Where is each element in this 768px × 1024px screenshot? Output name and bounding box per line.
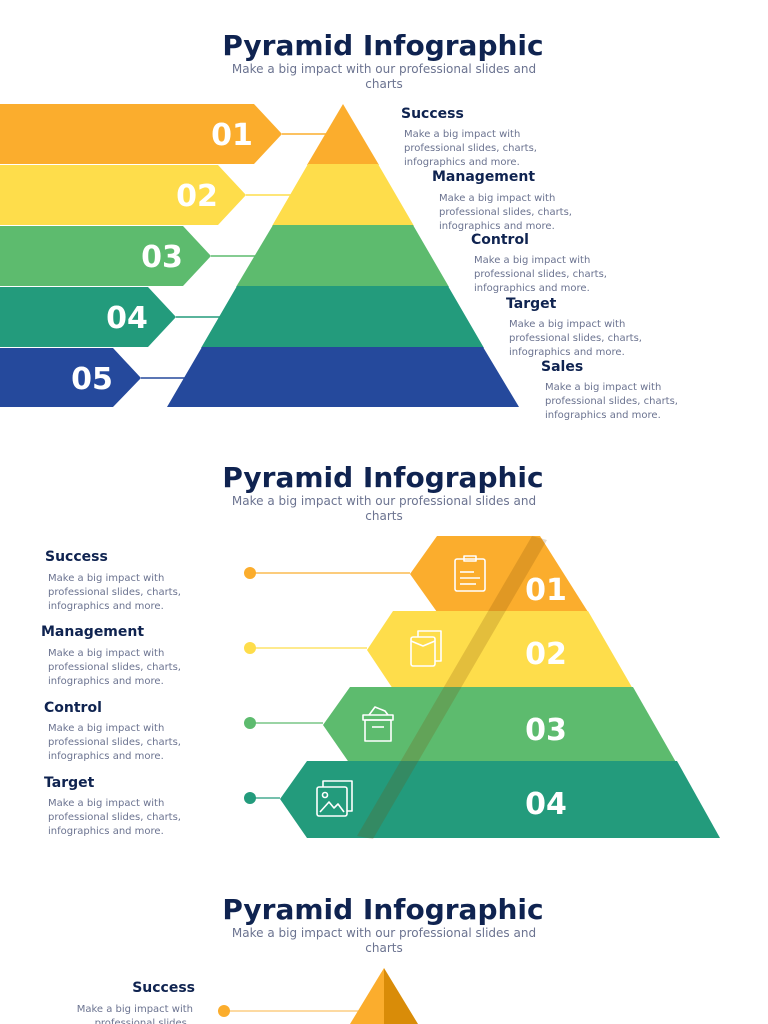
section 3 title	[222, 893, 544, 955]
arrow bars: 05	[71, 362, 113, 397]
pyramid 3	[218, 968, 418, 1024]
labels section 2: professional slides, charts,	[48, 737, 181, 748]
pyramid 2: 03	[525, 713, 567, 748]
labels section 2: Make a big impact with	[48, 573, 164, 584]
section 1 title: charts	[365, 77, 403, 91]
section 3 label	[77, 980, 195, 1024]
section 3 label: Make a big impact with	[77, 1004, 193, 1015]
labels section 1: Make a big impact with	[404, 129, 520, 140]
labels section 1: Target	[506, 296, 557, 312]
arrow bars: 03	[141, 240, 183, 275]
labels section 2: Management	[41, 624, 144, 640]
labels section 2: Make a big impact with	[48, 723, 164, 734]
pyramid 2: 02	[525, 637, 567, 672]
section 2 title	[222, 461, 544, 523]
labels section 1: Make a big impact with	[439, 193, 555, 204]
section 1 title: Make a big impact with our professional slides and	[232, 62, 536, 76]
section 2 title: Pyramid Infographic	[222, 461, 544, 494]
labels section 2: professional slides, charts,	[48, 662, 181, 673]
pyramid 2	[244, 536, 720, 839]
labels section 1: professional slides, charts,	[404, 143, 537, 154]
labels section 1: professional slides, charts,	[474, 269, 607, 280]
labels section 2: infographics and more.	[48, 826, 164, 837]
labels section 1: infographics and more.	[439, 221, 555, 232]
labels section 2: Make a big impact with	[48, 798, 164, 809]
labels section 1: infographics and more.	[404, 157, 520, 168]
section 1 title: Pyramid Infographic	[222, 29, 544, 62]
arrow bars: 01	[211, 118, 253, 153]
section 2 title: Make a big impact with our professional slides and	[232, 494, 536, 508]
labels section 2: infographics and more.	[48, 751, 164, 762]
icon: image	[317, 781, 352, 816]
labels section 1: Make a big impact with	[509, 319, 625, 330]
labels section 1: professional slides, charts,	[509, 333, 642, 344]
labels section 2: Control	[44, 700, 102, 716]
labels section 2: professional slides, charts,	[48, 587, 181, 598]
labels section 2: professional slides, charts,	[48, 812, 181, 823]
labels section 2: infographics and more.	[48, 676, 164, 687]
labels section 1: infographics and more.	[509, 347, 625, 358]
labels section 2: Target	[44, 775, 95, 791]
labels section 2	[41, 549, 181, 837]
icon: envelope	[411, 631, 441, 666]
icon: clipboard	[455, 556, 485, 591]
labels section 1: Sales	[541, 359, 583, 375]
labels section 1: Success	[401, 106, 464, 122]
labels section 1	[401, 106, 678, 421]
pyramid 2: 04	[525, 787, 567, 822]
arrow bars: 02	[176, 179, 218, 214]
icon: box	[363, 707, 393, 741]
labels section 1: professional slides, charts,	[439, 207, 572, 218]
section 3 label: Success	[132, 980, 195, 996]
section 1 title	[222, 29, 544, 91]
section 2 title: charts	[365, 509, 403, 523]
labels section 1: Make a big impact with	[474, 255, 590, 266]
labels section 1: Make a big impact with	[545, 382, 661, 393]
pyramid 1	[167, 104, 519, 407]
labels section 2: infographics and more.	[48, 601, 164, 612]
labels section 1: Management	[432, 169, 535, 185]
section 3 title: Make a big impact with our professional slides and	[232, 926, 536, 940]
section 3 title: charts	[365, 941, 403, 955]
labels section 1: Control	[471, 232, 529, 248]
labels section 1: infographics and more.	[545, 410, 661, 421]
arrow bars: 04	[106, 301, 148, 336]
arrow bars	[0, 104, 326, 407]
labels section 2: Make a big impact with	[48, 648, 164, 659]
labels section 1: professional slides, charts,	[545, 396, 678, 407]
section 3 title: Pyramid Infographic	[222, 893, 544, 926]
labels section 2: Success	[45, 549, 108, 565]
pyramid 2: 01	[525, 573, 567, 608]
labels section 1: infographics and more.	[474, 283, 590, 294]
